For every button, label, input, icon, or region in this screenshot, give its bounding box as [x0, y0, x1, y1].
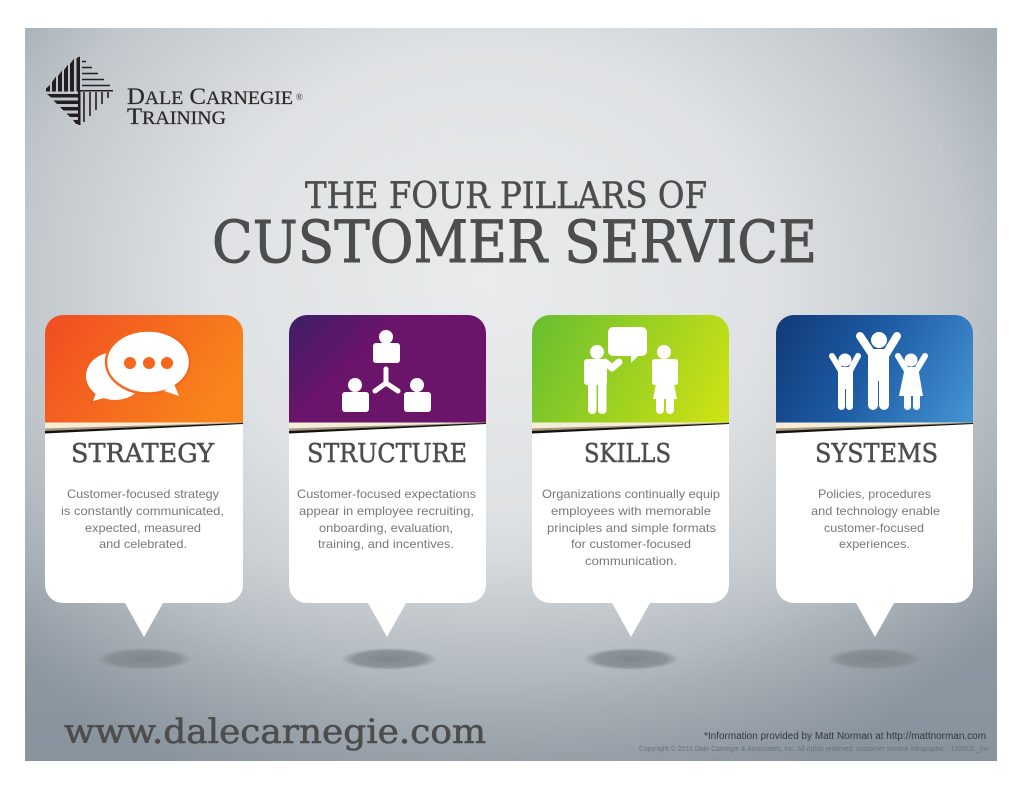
logo wordmark: TRAINING [127, 104, 226, 129]
description: employees with memorable [551, 504, 711, 518]
card body with pointer [289, 420, 486, 637]
icon: speech bubbles [86, 330, 190, 401]
icon: striped diamond [46, 56, 113, 125]
description: for customer-focused [571, 537, 691, 551]
description [297, 487, 476, 551]
description: experiences. [839, 537, 910, 551]
logo wordmark [127, 84, 303, 129]
title: CUSTOMER SERVICE [212, 208, 817, 276]
description: training, and incentives. [318, 537, 454, 551]
shadow [827, 648, 923, 670]
description: and celebrated. [99, 537, 187, 551]
shadow [341, 648, 437, 670]
description: and technology enable [811, 504, 940, 518]
description: expected, measured [85, 521, 201, 535]
card header [776, 315, 973, 423]
description [542, 487, 720, 568]
description: is constantly communicated, [61, 504, 224, 518]
title: THE FOUR PILLARS OF [305, 176, 707, 217]
fold band [45, 422, 243, 434]
panel: systems [776, 315, 973, 670]
fold band [289, 422, 486, 434]
card header [532, 315, 729, 423]
card body with pointer [776, 420, 973, 637]
description: communication. [585, 554, 677, 568]
panel: structure [289, 315, 486, 670]
description: Organizations continually equip [542, 487, 720, 501]
description: principles and simple formats [547, 521, 716, 535]
logo: Dale Carnegie Training [46, 56, 303, 129]
card header [45, 315, 243, 423]
heading: STRUCTURE [307, 439, 467, 469]
card header [289, 315, 486, 423]
description: Customer-focused strategy [67, 487, 219, 501]
icon: three people network [342, 330, 431, 412]
heading: STRATEGY [71, 439, 215, 469]
description: customer-focused [824, 521, 924, 535]
description [61, 487, 224, 551]
source note: *Information provided by Matt Norman at http://mattnorman.com [704, 731, 986, 742]
title [212, 176, 817, 276]
panel: skills [532, 315, 729, 670]
description: Customer-focused expectations [297, 487, 476, 501]
shadow [583, 648, 679, 670]
panel: strategy [45, 315, 243, 670]
heading: SYSTEMS [815, 439, 938, 469]
description: Policies, procedures [818, 487, 931, 501]
icon: three people cheering [832, 332, 925, 410]
heading: SKILLS [584, 439, 671, 469]
logo wordmark: ® [296, 92, 303, 102]
card body with pointer [532, 420, 729, 637]
logo wordmark: DALE CARNEGIE [127, 84, 293, 109]
copyright: Copyright © 2015 Dale Carnegie & Associates, Inc. All rights reserved. customer service infographic - 120815 _mn [639, 745, 989, 753]
description: appear in employee recruiting, [299, 504, 474, 518]
fold band [532, 422, 729, 434]
shadow [96, 648, 192, 670]
description: onboarding, evaluation, [319, 521, 453, 535]
card body with pointer [45, 420, 243, 637]
website url: www.dalecarnegie.com [64, 712, 486, 752]
description [811, 487, 940, 551]
icon: two people talking [584, 327, 678, 414]
fold band [776, 422, 973, 434]
